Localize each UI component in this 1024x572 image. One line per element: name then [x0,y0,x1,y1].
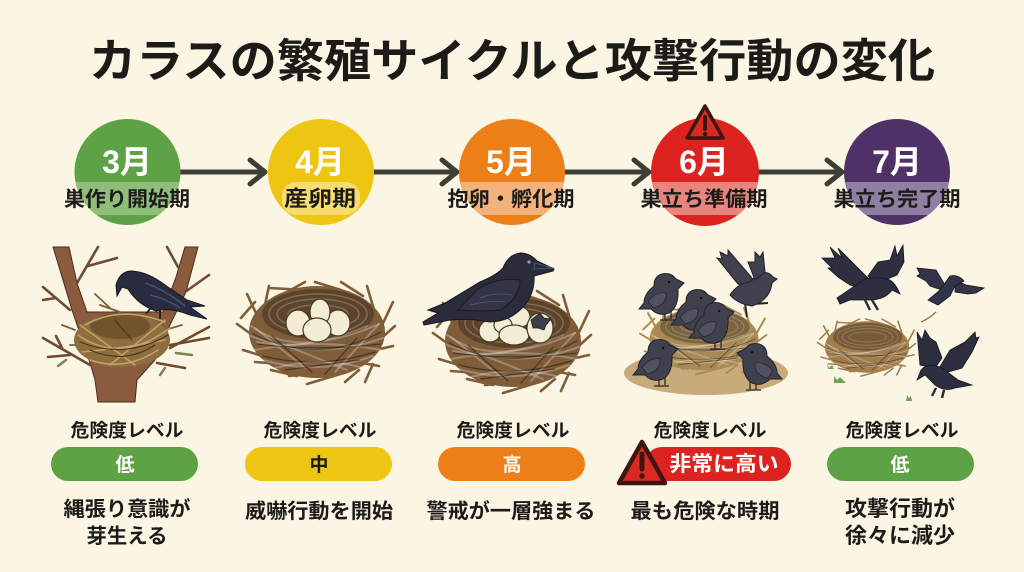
level pill: low: 低 [890,454,910,476]
illustration: fledglings around nest [624,250,788,395]
month badge: May: 抱卵・孵化期 [448,187,574,211]
illustration: crow incubating eggs [423,253,591,393]
month badge: July: 7月 [872,144,922,180]
level pill: very high: 非常に高い [670,453,778,476]
month badge: July: 巣立ち完了期 [834,188,960,211]
month badge: June: 6月 [679,144,729,180]
icon: large warning triangle [619,442,665,483]
flying crow lower right [917,330,979,398]
description: 芽生える [86,525,168,548]
month badge: March: 3月 [102,144,152,180]
danger label: 危険度レベル [264,420,376,441]
flying crow upper right [917,268,984,305]
panel: March [43,119,209,548]
description: 警戒が一層強まる [426,499,596,523]
month badge: March: 巣作り開始期 [64,188,190,211]
illustration: nest with eggs [237,282,395,384]
danger label: 危険度レベル [456,420,570,441]
level pill: low: 低 [115,454,135,476]
illustration: crow building nest in tree [43,247,209,402]
flying crow upper left [822,245,904,310]
level pill: medium: 中 [309,454,329,476]
icon: warning triangle on badge [687,106,723,138]
description: 徐々に減少 [845,524,955,548]
month badge: April: 産卵期 [284,187,356,211]
description [845,496,955,548]
panel: June [619,106,791,523]
panel: April [237,119,395,523]
month badge: May [448,119,574,225]
danger label: 危険度レベル [654,420,766,441]
danger label: 危険度レベル [846,420,958,441]
month badge: April [268,119,374,225]
panel: July [817,119,984,548]
description: 縄張り意識が [64,497,191,521]
timeline arrows [181,160,842,184]
level pill: high: 高 [502,454,522,476]
month badge: May: 5月 [486,144,536,180]
level pill: very high [645,447,791,481]
panel: May [423,119,596,523]
illustration: empty nest and departing crows [817,245,984,401]
description: 威嚇行動を開始 [245,499,394,523]
description [64,497,191,548]
danger label: 危険度レベル [70,420,184,441]
level pill: low [827,447,974,481]
level pill: low [51,447,198,481]
description: 攻撃行動が [845,496,955,521]
level pill: medium [245,447,392,481]
level pill: high [438,447,585,481]
month badge: April: 4月 [295,144,345,180]
title: カラスの繁殖サイクルと攻撃行動の変化 [89,35,935,87]
month badge: March [64,119,190,225]
month badge: June: 巣立ち準備期 [640,188,768,211]
month badge: June [640,118,768,226]
month badge: July [834,119,960,225]
description: 最も危険な時期 [630,499,780,523]
